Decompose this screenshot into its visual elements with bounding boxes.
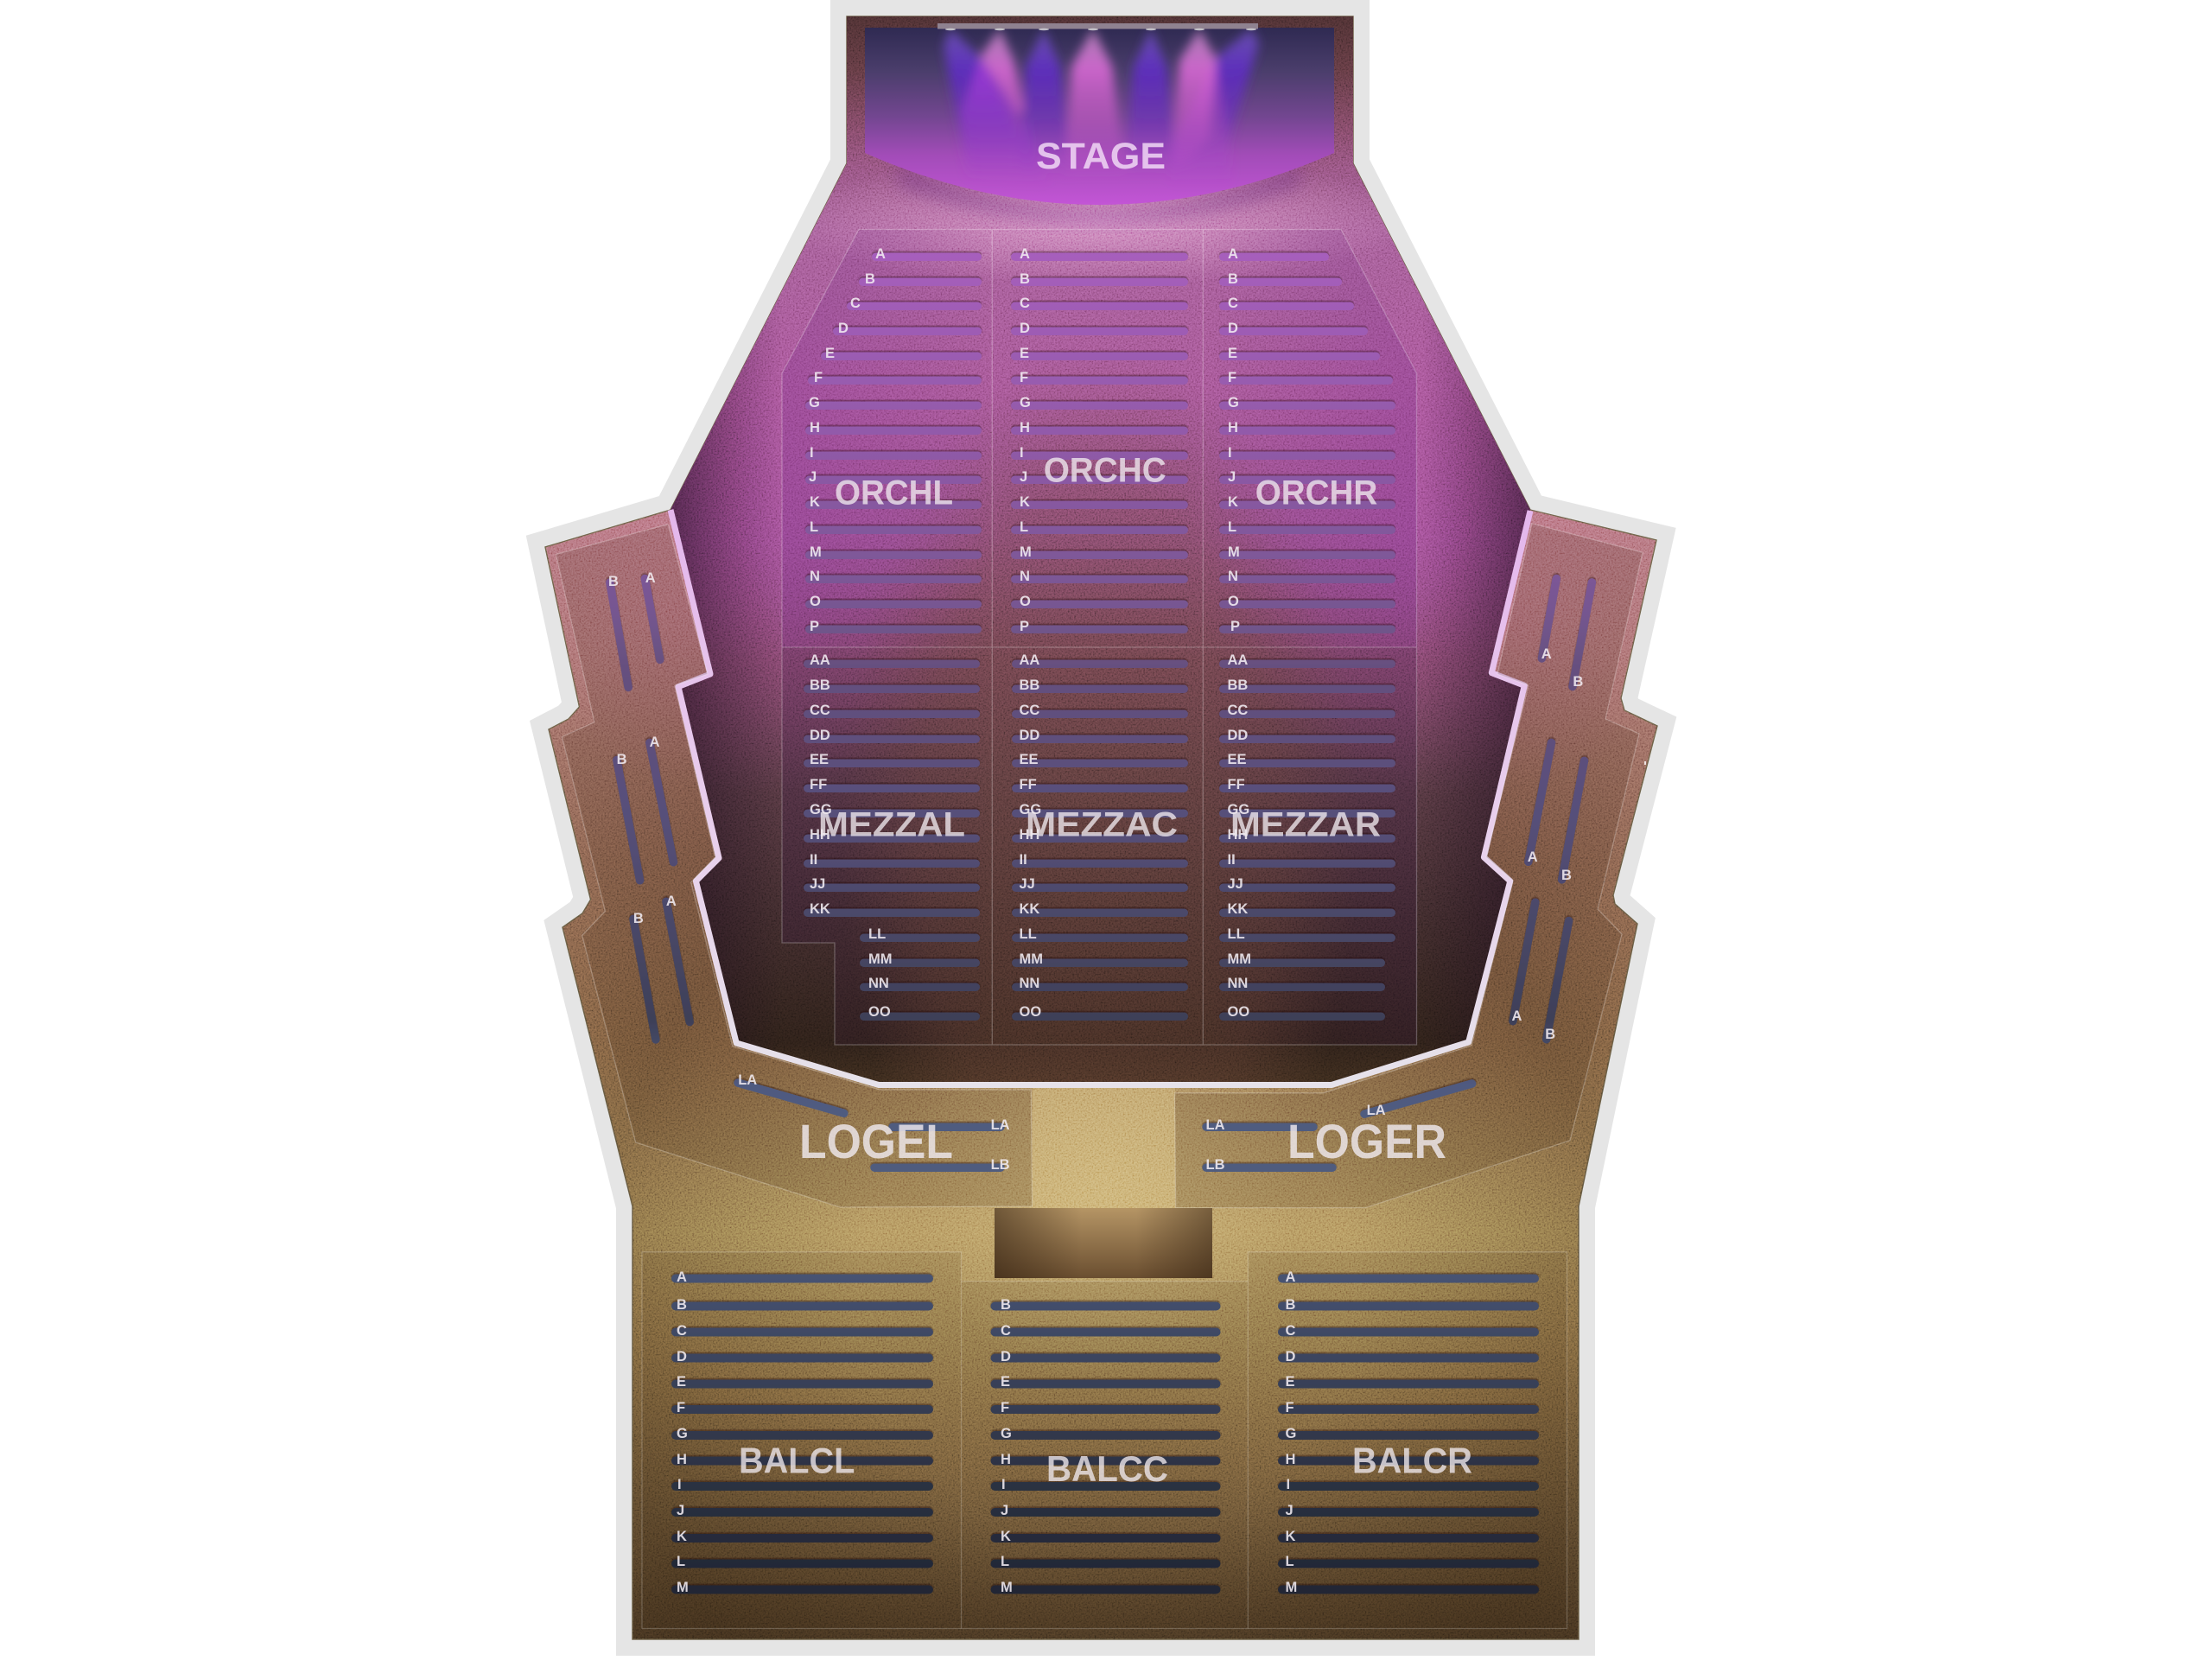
ORCHL label: ORCHL xyxy=(835,474,953,512)
MEZZAC row letters: DD xyxy=(1020,728,1039,743)
section: BALCL xyxy=(671,1269,933,1595)
section outlines: loge right xyxy=(1175,524,1643,1208)
ORCHL row letters: C xyxy=(850,296,861,311)
ORCHR row letters: J xyxy=(1228,469,1236,485)
ORCHC row letters: F xyxy=(1020,370,1028,385)
MEZZAL row letters: GG xyxy=(810,802,832,817)
balcony wall light strip xyxy=(671,510,1530,1085)
BALCL row letters: F xyxy=(677,1400,685,1415)
MEZZAR row letters: MM xyxy=(1227,951,1251,967)
LOGER seat rows xyxy=(1206,579,1592,1167)
MEZZAL row letters: JJ xyxy=(810,876,825,892)
MEZZAL seat rows xyxy=(804,660,980,1021)
BALCC row letters: C xyxy=(1001,1323,1011,1339)
section outlines: orchestra and mezzanine xyxy=(782,230,1417,1045)
MEZZAC row letters: MM xyxy=(1020,951,1043,967)
ORCHC row letters: L xyxy=(1020,519,1028,535)
BALCL row letters: I xyxy=(677,1477,682,1492)
BALCL label: BALCL xyxy=(739,1441,855,1481)
MEZZAC row letters: OO xyxy=(1020,1004,1041,1020)
ORCHL seat rows xyxy=(805,252,982,633)
LOGEL row letters: A xyxy=(645,570,656,586)
BALCL row letters: A xyxy=(677,1269,687,1285)
LOGER row letters: A xyxy=(1541,646,1552,662)
section: ORCHR xyxy=(1219,246,1395,634)
ORCHC row letters: E xyxy=(1020,346,1029,361)
LOGER row letters: B xyxy=(1545,1027,1555,1042)
MEZZAR row letters: AA xyxy=(1227,652,1248,668)
BALCR row letters: K xyxy=(1286,1529,1296,1544)
venue floor xyxy=(527,16,1676,1639)
LOGER label: LOGER xyxy=(1287,1114,1446,1168)
ORCHL row letters: L xyxy=(810,519,818,535)
BALCC seat rows xyxy=(990,1301,1220,1593)
ORCHL row letters: O xyxy=(810,594,821,609)
stage label: STAGE xyxy=(1036,136,1166,177)
ORCHC seat rows xyxy=(1011,252,1188,633)
BALCR row letters: J xyxy=(1286,1503,1294,1518)
BALCL row letters: D xyxy=(677,1349,687,1364)
ORCHL row letters: B xyxy=(865,271,875,287)
MEZZAR row letters: NN xyxy=(1227,976,1248,991)
MEZZAR row letters: GG xyxy=(1227,802,1249,817)
ORCHC row letters: G xyxy=(1020,395,1031,410)
BALCC row letters: L xyxy=(1001,1554,1009,1569)
ORCHL row letters: E xyxy=(825,346,835,361)
MEZZAL row letters: KK xyxy=(810,901,830,917)
ORCHC row letters: D xyxy=(1020,321,1030,336)
section outlines: balcony xyxy=(642,1252,1567,1628)
ORCHL row letters: F xyxy=(814,370,823,385)
ORCHR row letters: G xyxy=(1228,395,1239,410)
MEZZAR row letters: HH xyxy=(1227,827,1248,843)
BALCL row letters: M xyxy=(677,1580,689,1595)
balcony dividers xyxy=(961,1282,1248,1628)
ORCHL row letters: I xyxy=(810,445,814,461)
LOGEL row letters: LB xyxy=(991,1157,1010,1173)
section: MEZZAL xyxy=(804,652,980,1021)
BALCR row letters: I xyxy=(1286,1477,1290,1492)
LOGEL row letters: B xyxy=(608,574,619,589)
MEZZAR row letters xyxy=(1227,652,1251,1020)
LOGEL row letters: A xyxy=(666,894,677,909)
ORCHR row letters: F xyxy=(1228,370,1236,385)
ORCHL row letters: P xyxy=(810,619,819,634)
BALCL seat rows xyxy=(671,1274,933,1593)
lighting bar xyxy=(938,23,1258,30)
BALCC row letters: G xyxy=(1001,1426,1012,1441)
BALCC row letters: H xyxy=(1001,1452,1011,1467)
BALCR row letters: H xyxy=(1286,1452,1295,1467)
venue outer frame xyxy=(545,16,1657,1639)
ORCHR row letters: B xyxy=(1228,271,1238,287)
MEZZAR row letters: OO xyxy=(1227,1004,1249,1020)
ORCHR row letters: O xyxy=(1228,594,1239,609)
BALCC row letters: E xyxy=(1001,1374,1010,1390)
ORCHL row letters: J xyxy=(809,469,817,485)
section: MEZZAR xyxy=(1219,652,1395,1021)
LOGEL label: LOGEL xyxy=(799,1114,953,1168)
BALCL row letters: E xyxy=(677,1374,686,1390)
ORCHL row letters: G xyxy=(809,395,820,410)
LOGER row letters xyxy=(1206,646,1583,1173)
BALCR row letters: B xyxy=(1286,1297,1296,1313)
ORCHR row letters xyxy=(1228,246,1240,634)
ORCHL row letters: M xyxy=(810,544,822,560)
BALCC row letters xyxy=(1001,1297,1013,1595)
BALCC row letters: D xyxy=(1001,1349,1011,1364)
MEZZAL row letters: II xyxy=(810,852,817,868)
ORCHR row letters: P xyxy=(1230,619,1240,634)
MEZZAL row letters: AA xyxy=(810,652,830,668)
MEZZAL label: MEZZAL xyxy=(818,805,965,843)
ORCHL row letters xyxy=(809,246,886,634)
LOGEL row letters: B xyxy=(617,752,627,767)
section: LOGEL xyxy=(608,570,1010,1173)
BALCR row letters: A xyxy=(1286,1269,1296,1285)
LOGEL row letters: B xyxy=(633,911,644,926)
ORCHR row letters: M xyxy=(1228,544,1240,560)
ORCHC row letters xyxy=(1020,246,1032,634)
section: ORCHL xyxy=(805,246,982,634)
ORCHL row letters: H xyxy=(810,420,820,436)
MEZZAL row letters: OO xyxy=(868,1004,891,1020)
LOGEL row letters xyxy=(608,570,1010,1173)
BALCC row letters: B xyxy=(1001,1297,1011,1313)
BALCL row letters: L xyxy=(677,1554,685,1569)
BALCC row letters: F xyxy=(1001,1400,1009,1415)
MEZZAR row letters: II xyxy=(1227,852,1236,868)
section: BALCR xyxy=(1278,1269,1539,1595)
BALCL row letters: J xyxy=(677,1503,684,1518)
LOGER row letters: LA xyxy=(1367,1103,1386,1118)
MEZZAR row letters: LL xyxy=(1227,926,1245,942)
MEZZAC row letters: BB xyxy=(1020,677,1039,693)
MEZZAC row letters xyxy=(1020,652,1043,1020)
ORCHL row letters: K xyxy=(810,494,820,510)
BALCC row letters: J xyxy=(1001,1503,1008,1518)
ORCHR row letters: E xyxy=(1228,346,1237,361)
MEZZAR row letters: KK xyxy=(1227,901,1248,917)
MEZZAL row letters: FF xyxy=(810,777,827,792)
BALCR row letters: C xyxy=(1286,1323,1296,1339)
orchestra well background xyxy=(671,16,1530,1082)
ORCHR label: ORCHR xyxy=(1255,474,1377,512)
MEZZAR row letters: JJ xyxy=(1227,876,1243,892)
section panel tints xyxy=(782,230,1417,1045)
section: MEZZAC xyxy=(1012,652,1188,1021)
BALCC row letters: M xyxy=(1001,1580,1013,1595)
ORCHR seat rows xyxy=(1219,252,1395,633)
MEZZAR row letters: FF xyxy=(1227,777,1245,792)
MEZZAC row letters: II xyxy=(1020,852,1027,868)
MEZZAC row letters: GG xyxy=(1020,802,1041,817)
ORCHC row letters: H xyxy=(1020,420,1030,436)
ORCHC row letters: P xyxy=(1020,619,1029,634)
MEZZAL row letters: NN xyxy=(868,976,889,991)
BALCL row letters: B xyxy=(677,1297,687,1313)
ORCHC row letters: N xyxy=(1020,569,1030,584)
section: LOGER xyxy=(1206,579,1646,1173)
BALCR row letters: G xyxy=(1286,1426,1296,1441)
MEZZAL row letters: BB xyxy=(810,677,830,693)
MEZZAL row letters: HH xyxy=(810,827,830,843)
BALCR seat rows xyxy=(1278,1274,1539,1593)
BALCR row letters: M xyxy=(1286,1580,1297,1595)
MEZZAL row letters xyxy=(810,652,892,1020)
LOGER row letters: B xyxy=(1561,868,1572,883)
ORCHR row letters: N xyxy=(1228,569,1238,584)
LOGER row letters: A xyxy=(1528,849,1538,865)
BALCR row letters: E xyxy=(1286,1374,1295,1390)
MEZZAL row letters: LL xyxy=(868,926,886,942)
MEZZAR seat rows xyxy=(1219,660,1395,1021)
LOGER row letters: B xyxy=(1573,674,1583,690)
ORCHC row letters: C xyxy=(1020,296,1030,311)
LOGER row letters: LA xyxy=(1206,1117,1225,1133)
MEZZAC row letters: LL xyxy=(1020,926,1037,942)
BALCR row letters xyxy=(1286,1269,1297,1595)
MEZZAL row letters: MM xyxy=(868,951,892,967)
MEZZAR row letters: DD xyxy=(1227,728,1248,743)
ORCHR row letters: L xyxy=(1228,519,1236,535)
MEZZAC row letters: CC xyxy=(1020,703,1039,718)
MEZZAC row letters: KK xyxy=(1020,901,1039,917)
ORCHC label: ORCHC xyxy=(1044,451,1166,489)
ORCHC row letters: J xyxy=(1020,469,1027,485)
MEZZAR row letters: CC xyxy=(1227,703,1248,718)
ORCHC row letters: M xyxy=(1020,544,1032,560)
MEZZAR row letters: EE xyxy=(1227,752,1247,767)
BALCL row letters: C xyxy=(677,1323,687,1339)
BALCL row letters: K xyxy=(677,1529,687,1544)
LOGEL seat rows xyxy=(610,579,1001,1167)
BALCL row letters: G xyxy=(677,1426,688,1441)
ORCHC row letters: B xyxy=(1020,271,1030,287)
stage xyxy=(865,23,1334,223)
MEZZAC seat rows xyxy=(1012,660,1188,1021)
ORCHL row letters: N xyxy=(810,569,820,584)
ORCHR row letters: D xyxy=(1228,321,1238,336)
ORCHL row letters: D xyxy=(838,321,849,336)
BALCC label: BALCC xyxy=(1046,1448,1168,1489)
MEZZAC row letters: NN xyxy=(1020,976,1039,991)
ORCHR row letters: K xyxy=(1228,494,1238,510)
ORCHC row letters: K xyxy=(1020,494,1030,510)
BALCC row letters: I xyxy=(1001,1477,1006,1492)
MEZZAC label: MEZZAC xyxy=(1026,805,1178,843)
ORCHC row letters: I xyxy=(1020,445,1024,461)
BALCR row letters: F xyxy=(1286,1400,1294,1415)
LOGEL row letters: LA xyxy=(738,1072,757,1088)
BALCL row letters: H xyxy=(677,1452,687,1467)
stage spotlights xyxy=(938,29,1264,159)
ORCHR row letters: H xyxy=(1228,420,1238,436)
BALCR row letters: L xyxy=(1286,1554,1294,1569)
ORCHC row letters: A xyxy=(1020,246,1030,262)
MEZZAR label: MEZZAR xyxy=(1230,805,1381,843)
MEZZAL row letters: CC xyxy=(810,703,830,718)
LOGER row letters: A xyxy=(1511,1008,1522,1024)
MEZZAC row letters: HH xyxy=(1020,827,1039,843)
MEZZAC row letters: FF xyxy=(1020,777,1037,792)
ORCHR row letters: C xyxy=(1228,296,1238,311)
MEZZAL row letters: DD xyxy=(810,728,830,743)
LOGEL row letters: LA xyxy=(991,1117,1010,1133)
ORCHR row letters: A xyxy=(1228,246,1238,262)
BALCL row letters xyxy=(677,1269,689,1595)
ORCHL row letters: A xyxy=(875,246,886,262)
MEZZAC row letters: EE xyxy=(1020,752,1039,767)
ORCHC row letters: O xyxy=(1020,594,1031,609)
ORCHR row letters: I xyxy=(1228,445,1232,461)
LOGER row letters: LB xyxy=(1206,1157,1225,1173)
MEZZAL row letters: EE xyxy=(810,752,829,767)
BALCC row letters: K xyxy=(1001,1529,1011,1544)
MEZZAC row letters: AA xyxy=(1020,652,1039,668)
LOGEL row letters: A xyxy=(650,735,660,750)
MEZZAR row letters: BB xyxy=(1227,677,1248,693)
section: BALCC xyxy=(990,1297,1220,1595)
vomitorium notch xyxy=(995,1208,1212,1278)
BALCR row letters: D xyxy=(1286,1349,1296,1364)
MEZZAC row letters: JJ xyxy=(1020,876,1035,892)
surface texture xyxy=(545,16,1657,1639)
section outlines: loge left xyxy=(556,525,1033,1207)
BALCR label: BALCR xyxy=(1352,1441,1472,1481)
section: ORCHC xyxy=(1011,246,1188,634)
